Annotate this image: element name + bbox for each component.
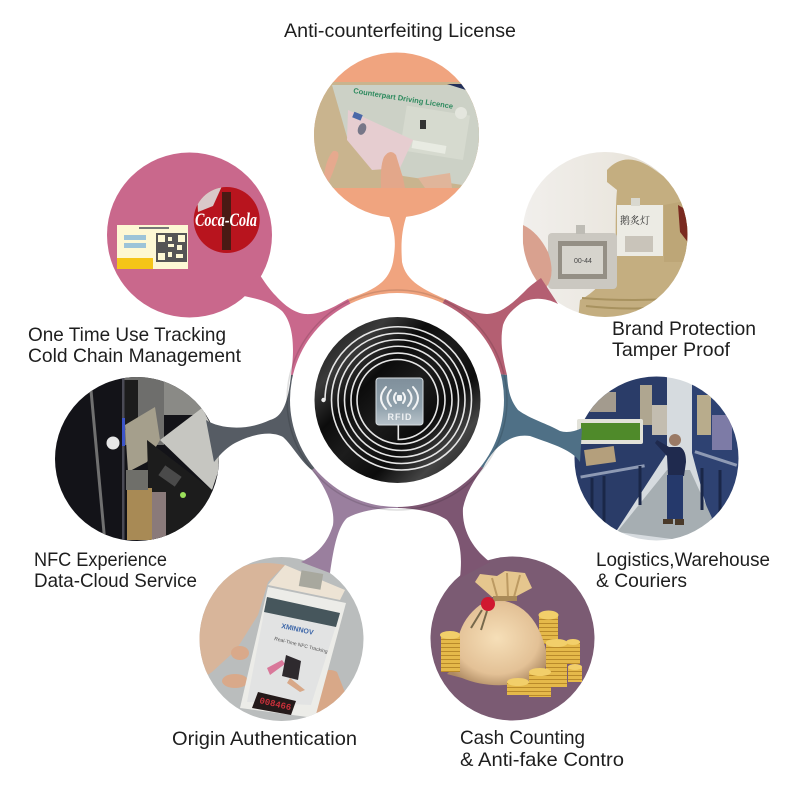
hub arm: mauve connector to origin xyxy=(301,440,400,573)
panel: anti-counterfeiting license photo xyxy=(310,52,485,218)
Coca-Cola disc: Coca-Cola xyxy=(195,211,257,231)
green RFID tag xyxy=(577,419,643,444)
RFID chip icon: RFID xyxy=(388,412,412,422)
gold coin stacks in front xyxy=(440,631,582,697)
hub arm: plum connector to cash counting xyxy=(398,440,490,578)
label: one time use tracking, cold chain management: Cold Chain Management xyxy=(28,345,242,367)
hub arm: blue connector to logistics xyxy=(440,370,582,468)
QR code label xyxy=(117,225,188,269)
smartphone: Real-Time NFC Tracking xyxy=(274,636,328,655)
label: cash counting, anti-fake control: & Anti-fake Contro xyxy=(460,749,624,771)
label: one time use tracking, cold chain management: One Time Use Tracking xyxy=(28,324,226,346)
label: brand protection, tamper proof xyxy=(612,318,756,361)
smartphone: 008466 xyxy=(258,696,292,713)
antenna spiral coil xyxy=(321,327,472,470)
panel: anti-counterfeiting license photo: Counterpart Driving Licence xyxy=(353,86,454,111)
label: NFC experience, data-cloud service: NFC Experience xyxy=(34,549,167,571)
label: cash counting, anti-fake control xyxy=(460,727,624,771)
center RFID NFC tag xyxy=(314,317,480,483)
panel: one time use tracking photo xyxy=(107,152,272,318)
gold coin stacks behind bag xyxy=(538,610,558,644)
label: logistics, warehouse, couriers: & Couriers xyxy=(596,570,687,592)
label: origin authentication: Origin Authentication xyxy=(172,728,357,750)
smartphone xyxy=(240,587,346,718)
label: NFC experience, data-cloud service: Data-Cloud Service xyxy=(34,570,197,592)
RFID chip icon xyxy=(376,378,423,425)
label: NFC experience, data-cloud service xyxy=(34,549,197,592)
hub arm: slate connector to NFC xyxy=(206,370,350,470)
label: brand protection, tamper proof: Tamper Proof xyxy=(612,339,731,361)
hub arm: red connector to brand protection xyxy=(420,278,558,375)
panel: NFC data-cloud service photo xyxy=(55,375,220,542)
label: logistics, warehouse, couriers xyxy=(596,549,770,592)
panel: logistics warehouse photo xyxy=(570,375,742,542)
smartphone: XMINNOV xyxy=(281,623,314,637)
money bag xyxy=(447,571,547,685)
panel: origin authentication photo xyxy=(197,557,364,721)
label: brand protection, tamper proof: Brand Protection xyxy=(612,318,756,340)
panel: brand protection photo: 鹅炙灯 xyxy=(620,214,650,227)
hub arm: pink connector to tracking xyxy=(244,272,370,375)
panel: brand protection photo xyxy=(522,152,690,320)
label: logistics, warehouse, couriers: Logistics,Warehouse xyxy=(596,549,770,571)
label: one time use tracking, cold chain management xyxy=(28,324,242,367)
heading: anti-counterfeiting license: Anti-counterfeiting License xyxy=(284,20,516,42)
warehouse worker xyxy=(655,434,686,525)
Coca-Cola disc xyxy=(194,186,260,253)
hub arm: orange connector to license xyxy=(348,214,445,340)
panel: cash counting illustration xyxy=(430,556,594,720)
panel: brand protection photo: 00-44 xyxy=(574,258,592,265)
label: cash counting, anti-fake control: Cash Counting xyxy=(460,727,585,749)
center white hub xyxy=(287,290,507,510)
